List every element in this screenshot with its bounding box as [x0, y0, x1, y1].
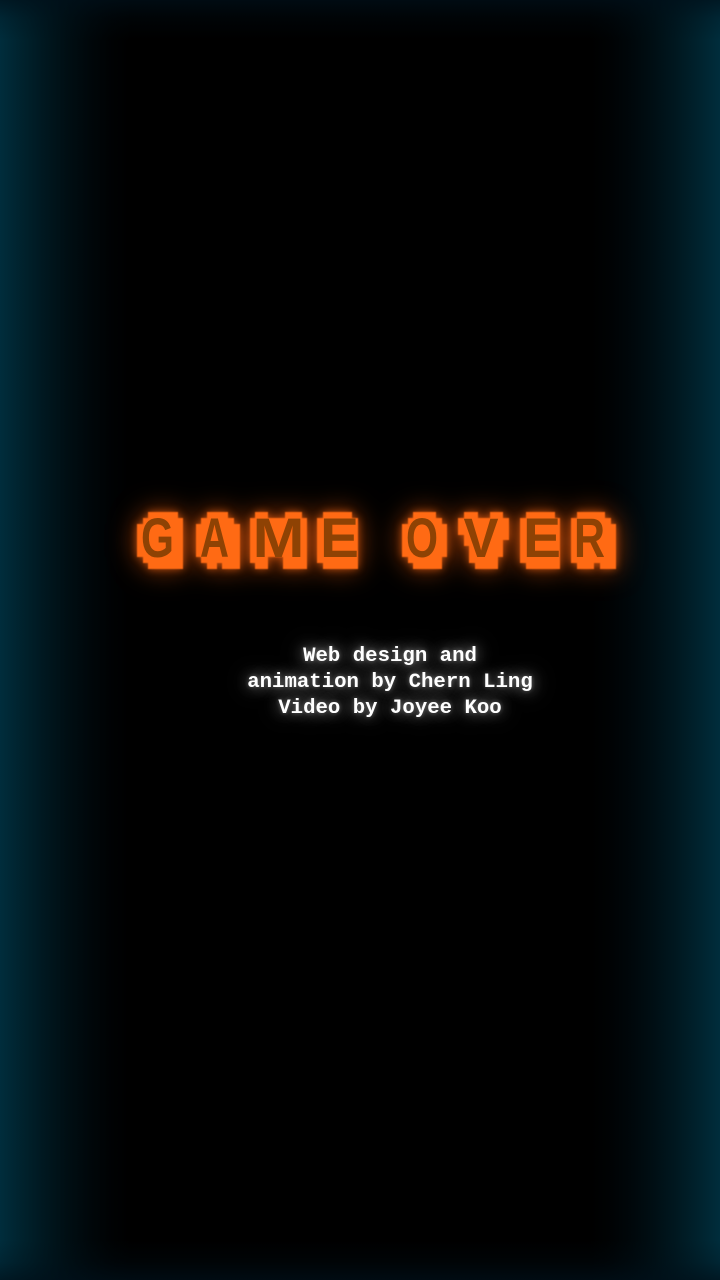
title: GAME OVER: A: [200, 506, 229, 569]
title: GAME OVER: G: [141, 506, 174, 569]
credits text: Web design and: [303, 645, 477, 668]
credits text: [241, 639, 542, 724]
title: GAME OVER: V: [464, 506, 498, 569]
title: GAME OVER: E: [523, 506, 561, 569]
credits text: Video by Joyee Koo: [278, 697, 502, 720]
title: GAME OVER: E: [320, 506, 359, 569]
title: GAME OVER: O: [406, 506, 438, 569]
title: GAME OVER: R: [574, 506, 605, 569]
credits text: animation by Chern Ling: [247, 671, 533, 694]
title: GAME OVER: M: [252, 506, 304, 569]
